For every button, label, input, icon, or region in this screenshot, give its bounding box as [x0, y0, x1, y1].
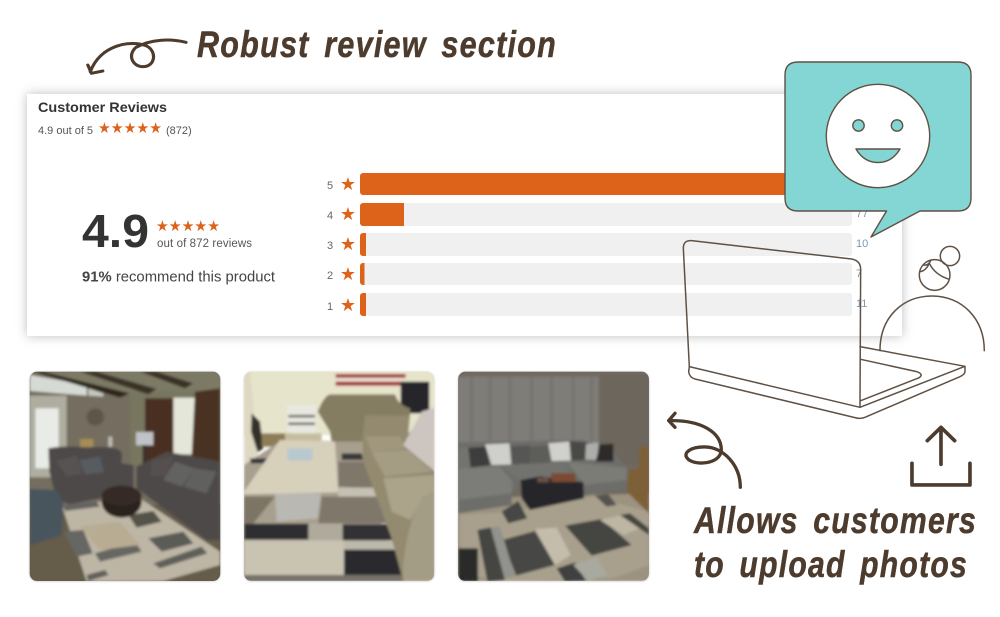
- bar chart: rating distribution: 2: [327, 270, 333, 282]
- rating summary line: (872): [166, 125, 192, 137]
- bar chart: rating distribution: 10: [856, 238, 868, 250]
- laptop screen: [683, 241, 861, 407]
- icon: upload: [912, 427, 970, 485]
- bar chart: rating distribution: [327, 173, 868, 316]
- laptop illustration: [683, 241, 984, 418]
- bar chart: rating distribution: 77: [856, 208, 868, 220]
- title: Robust review section: Robust review section: [197, 24, 557, 65]
- smiley face: [826, 84, 930, 188]
- rating summary line: [38, 119, 192, 137]
- laptop base: [689, 347, 965, 418]
- bar chart: rating distribution: ★: [340, 174, 356, 195]
- callout: speech bubble with smiley face: [785, 62, 971, 237]
- bar chart: rating distribution: 11: [856, 298, 867, 310]
- caption: Allows customers to upload photos: [693, 500, 977, 585]
- bar chart: rating distribution: 3: [327, 240, 333, 252]
- big rating score: 4.9: [82, 205, 149, 257]
- photo: grey sectional with patterned rug: [457, 368, 653, 582]
- heading: Customer Reviews: Customer Reviews: [38, 99, 167, 115]
- bar chart: rating distribution: 7: [856, 268, 862, 280]
- person illustration: [880, 246, 984, 351]
- laptop touchpad: [861, 359, 921, 401]
- recommendation text: 91% recommend this product: [82, 270, 275, 286]
- bar chart: rating distribution: ★: [340, 234, 356, 255]
- big rating score: out of 872 reviews: [157, 238, 252, 250]
- big rating score: [82, 205, 252, 257]
- photo: beige sectional and marble coffee table: [242, 368, 438, 582]
- bar chart: rating distribution: 5: [327, 180, 333, 192]
- rating summary line: ★★★★★: [98, 119, 162, 137]
- rating summary line: 4.9 out of 5: [38, 125, 93, 137]
- bar chart: rating distribution: ★: [340, 295, 356, 316]
- arrow: curled arrow toward review panel: [88, 40, 186, 73]
- bar chart: rating distribution: ★: [340, 264, 356, 285]
- arrow: looping arrow toward photos: [669, 413, 740, 487]
- big rating score: ★★★★★: [156, 217, 220, 235]
- bar chart: rating distribution: ★: [340, 204, 356, 225]
- photo: living room with grey sofas: [27, 368, 227, 585]
- bar chart: rating distribution: 4: [327, 210, 333, 222]
- bar chart: rating distribution: 1: [327, 301, 333, 313]
- panel: customer reviews card: [27, 94, 902, 336]
